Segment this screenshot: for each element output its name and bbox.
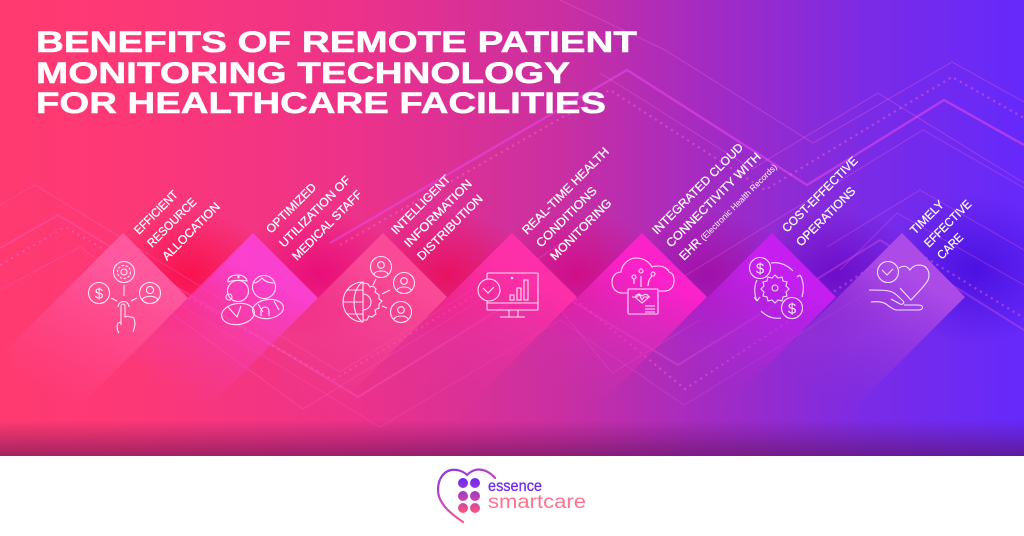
icon: globe gear network: [343, 256, 414, 322]
title: FOR HEALTHCARE FACILITIES: [36, 87, 606, 120]
label: timely effective care: EFFECTIVE: [921, 197, 974, 250]
panel: cost-effective operations: [652, 154, 861, 417]
zigzag line pattern: [0, 0, 1024, 427]
label: real-time health conditions monitoring: REAL-TIME HEALTH: [519, 144, 612, 237]
icon: heart outline with dots: [438, 469, 495, 522]
label: integrated cloud connectivity with EHR: EHR(Electronic Health Records): [676, 160, 780, 263]
panel: efficient resource allocation: [3, 187, 223, 418]
label: cost-effective operations: OPERATIONS: [793, 184, 858, 249]
logo wordmark: [488, 478, 586, 513]
icon: monitor clock chart: [478, 273, 538, 317]
panel: optimized utilization of medical staff: [133, 173, 365, 418]
icon: gear and money cycle: $: [788, 300, 797, 318]
title: [36, 26, 637, 120]
icon: gear and money cycle: $: [756, 260, 765, 278]
label: real-time health conditions monitoring: MONITORING: [547, 196, 614, 263]
label: optimized utilization of medical staff: MEDICAL STAFF: [289, 187, 365, 263]
title: BENEFITS OF REMOTE PATIENT: [36, 26, 637, 59]
label: timely effective care: [907, 197, 974, 262]
label: intelligent information distribution: DISTRIBUTION: [414, 192, 486, 263]
label: intelligent information distribution: INTELLIGENT: [388, 172, 454, 237]
panel: intelligent information distribution: [263, 172, 486, 417]
label: efficient resource allocation: RESOURCE: [144, 195, 199, 250]
panel: integrated cloud connectivity with EHR: [522, 140, 780, 417]
label: intelligent information distribution: INFORMATION: [401, 177, 475, 250]
icon: cloud and health record: [612, 258, 674, 314]
label: efficient resource allocation: EFFICIENT: [131, 187, 181, 237]
label: integrated cloud connectivity with EHR: CONNECTIVITY WITH: [663, 150, 764, 250]
label: intelligent information distribution: [388, 172, 486, 263]
icon: resource allocation hand: $: [95, 286, 104, 302]
icon: gear and money cycle: [750, 258, 803, 318]
label: efficient resource allocation: [131, 187, 223, 263]
icon: nurse and doctor: [220, 275, 285, 327]
icon: hand holding heart with clock: [869, 262, 929, 310]
label: optimized utilization of medical staff: OPTIMIZED: [263, 180, 319, 236]
label: cost-effective operations: COST-EFFECTIVE: [779, 154, 861, 235]
label: optimized utilization of medical staff: [263, 173, 365, 263]
label: real-time health conditions monitoring: CONDITIONS: [533, 184, 600, 250]
label: timely effective care: TIMELY: [907, 198, 947, 237]
shadow glows behind diamonds: [103, 195, 1024, 345]
label: efficient resource allocation: ALLOCATION: [159, 199, 223, 263]
label: integrated cloud connectivity with EHR: INTEGRATED CLOUD: [649, 140, 746, 237]
logo: essence smartcare: [438, 469, 586, 522]
panel: real-time health conditions monitoring: [392, 144, 614, 417]
label: timely effective care: CARE: [934, 230, 966, 262]
icon: resource allocation hand: [88, 262, 160, 333]
title: MONITORING TECHNOLOGY: [36, 57, 570, 90]
panel: timely effective care: [782, 197, 974, 417]
label: optimized utilization of medical staff: UTILIZATION OF: [276, 173, 353, 250]
label: integrated cloud connectivity with EHR: [649, 140, 780, 263]
logo wordmark: essence: [488, 478, 542, 495]
logo wordmark: smartcare: [488, 492, 586, 513]
